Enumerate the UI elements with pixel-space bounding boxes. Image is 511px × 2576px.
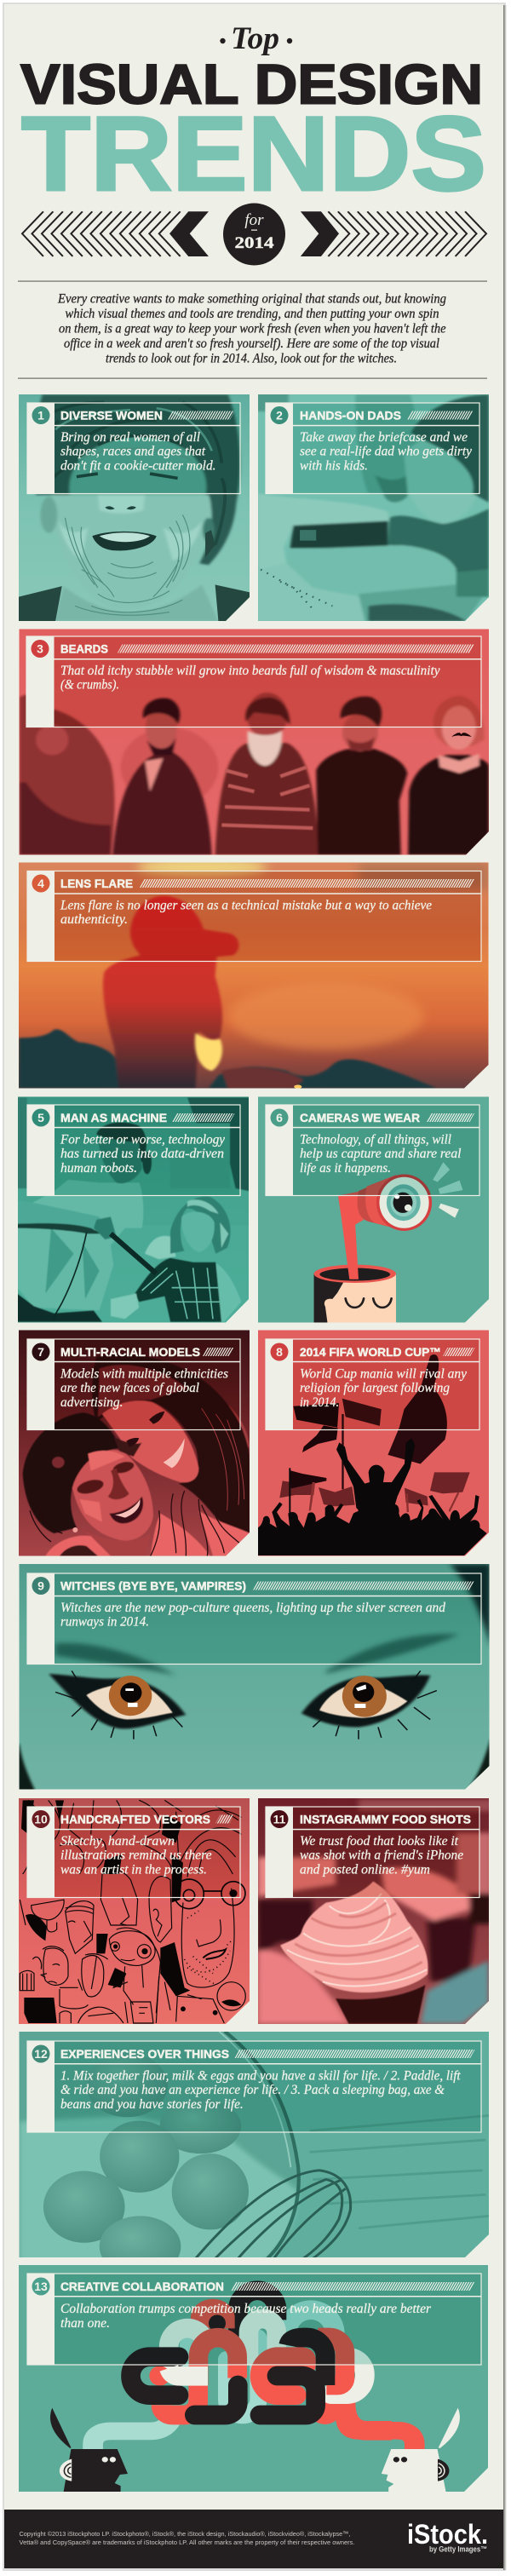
- text box 3: That old itchy stubble will grow into beards full of wisdom & masculinity: [60, 664, 440, 678]
- text box 12: 12: [34, 2047, 48, 2061]
- text box 9: WITCHES (BYE BYE, VAMPIRES): [60, 1579, 246, 1593]
- text box 13: than one.: [60, 2316, 110, 2331]
- logo: iStock by Getty Images: by Getty Images™: [429, 2545, 487, 2554]
- text box 3: (& crumbs).: [60, 678, 119, 693]
- text box 7: Models with multiple ethnicities: [60, 1366, 228, 1382]
- illustration: two heads with tangled thoughts: [15, 2262, 492, 2496]
- text box 11: INSTAGRAMMY FOOD SHOTS: [300, 1813, 471, 1826]
- icon: right light head: [382, 2408, 460, 2492]
- text box 10: 10: [34, 1813, 48, 1826]
- photo: pink cupcakes: [256, 1797, 492, 2026]
- copyright text: Vetta® and CopySpace® are trademarks of iStockphoto LP. All other marks are the property of their respective owners.: [19, 2539, 354, 2546]
- panel 8: FIFA world cup: [256, 1327, 494, 1559]
- intro text: office in a week and aren't so fresh yourself). Here are some of the top visual: [64, 336, 439, 351]
- text box 10: was an artist in the process.: [60, 1862, 207, 1877]
- text box 12: beans and you have stories for life.: [60, 2097, 244, 2112]
- badge: for 2014: 2014: [235, 234, 274, 252]
- photo: brown eyes in teal face: [18, 1561, 491, 1792]
- panel 1: diverse women: [16, 393, 253, 624]
- badge: for 2014: for: [244, 211, 264, 229]
- icon: left dark head: [50, 2408, 128, 2492]
- text box 8: World Cup mania will rival any: [300, 1366, 467, 1382]
- photo: woman and girl: [15, 1329, 254, 1559]
- photo: sunset silhouette: [16, 857, 492, 1090]
- panel 5: man as machine: [15, 1095, 254, 1325]
- photo: retro man and woman: [15, 1095, 254, 1325]
- panel 3: beards: [18, 627, 491, 859]
- text box 8: 2014 FIFA WORLD CUP™: [300, 1345, 441, 1359]
- text box 10: Sketchy, hand-drawn: [60, 1834, 175, 1849]
- text box 11: [266, 1807, 479, 1898]
- text box 5: 5: [37, 1111, 44, 1124]
- text box 9: Witches are the new pop-culture queens, lighting up the silver screen and: [60, 1601, 445, 1615]
- text box 8: 8: [276, 1345, 283, 1359]
- text box 12: EXPERIENCES OVER THINGS: [60, 2047, 229, 2061]
- text box 10: [27, 1807, 240, 1898]
- title: Visual Design: VISUAL DESIGN: [20, 53, 483, 116]
- text box 11: 11: [273, 1813, 286, 1826]
- text box 6: Technology, of all things, will: [300, 1133, 451, 1147]
- copyright text: [19, 2530, 354, 2546]
- text box 9: 9: [37, 1579, 44, 1593]
- text box 6: 6: [276, 1111, 283, 1124]
- title: Top: Top: [231, 21, 279, 56]
- text box 13: CREATIVE COLLABORATION: [60, 2280, 224, 2293]
- text box 8: religion for largest following: [300, 1381, 450, 1395]
- text box 4: authenticity.: [60, 912, 128, 927]
- photo: eggs and whisk in bowl: [18, 2030, 491, 2277]
- text box 2: see a real-life dad who gets dirty: [300, 445, 472, 459]
- text box 5: has turned us into data-driven: [60, 1147, 224, 1161]
- text box 6: CAMERAS WE WEAR: [300, 1111, 420, 1124]
- text box 3: 3: [37, 642, 43, 656]
- header: [20, 21, 486, 266]
- text box 4: Lens flare is no longer seen as a technical mistake but a way to achieve: [60, 898, 432, 913]
- text box 1: 1: [37, 409, 44, 423]
- icon: light rays: [433, 1162, 462, 1218]
- text box 11: and posted online. #yum: [300, 1862, 430, 1877]
- text box 3: [26, 636, 481, 727]
- text box 9: runways in 2014.: [60, 1615, 149, 1630]
- text box 4: 4: [37, 877, 44, 890]
- text box 8: in 2014.: [300, 1395, 339, 1410]
- intro text: which visual themes and tools are trending, and then putting your own spin: [65, 307, 439, 321]
- icon: interlaced tubes: [131, 2291, 392, 2430]
- photo: dad and child: [256, 393, 492, 624]
- text box 13: [27, 2274, 481, 2365]
- text box 5: MAN AS MACHINE: [60, 1111, 167, 1124]
- panel 13: creative collaboration: [15, 2262, 492, 2496]
- text box 7: are the new faces of global: [60, 1381, 199, 1395]
- text box 12: [27, 2041, 481, 2132]
- text box 11: was shot with a friend's iPhone: [300, 1849, 463, 1863]
- text box 2: [266, 403, 479, 494]
- icon: right eye: [301, 1670, 437, 1739]
- text box 7: 7: [37, 1345, 44, 1359]
- icon: periscope stalk and barrel: [338, 1175, 397, 1279]
- title: Trends: TRENDS: [21, 95, 486, 213]
- text box 4: LENS FLARE: [60, 877, 133, 890]
- footer: [4, 2510, 503, 2568]
- text box 10: illustrations remind us there: [60, 1849, 212, 1863]
- text box 11: We trust food that looks like it: [300, 1834, 459, 1849]
- copyright text: Copyright ©2013 iStockphoto LP. iStockphoto®, iStock®, the iStock design, iStockaudio®, iStockvideo®, iStockalypse™,: [19, 2530, 351, 2538]
- text box 1: [27, 403, 240, 494]
- text box 1: DIVERSE WOMEN: [60, 409, 163, 423]
- text box 10: HANDCRAFTED VECTORS: [60, 1813, 210, 1826]
- text box 1: don't fit a cookie-cutter mold.: [60, 458, 216, 473]
- text box 4: [27, 871, 481, 961]
- text box 3: BEARDS: [60, 642, 108, 656]
- text box 1: Bring on real women of all: [60, 430, 200, 445]
- text box 12: & ride and you have an experience for life. / 3. Pack a sleeping bag, axe &: [60, 2083, 445, 2097]
- chevron band: [22, 211, 486, 256]
- text box 6: help us capture and share real: [300, 1147, 462, 1161]
- icon: eye lens: [376, 1175, 432, 1231]
- intro text: on them, is a great way to keep your work fresh (even when you haven't left the: [59, 322, 446, 336]
- intro text: trends to look out for in 2014. Also, look out for the witches.: [106, 351, 397, 366]
- text box 7: MULTI-RACIAL MODELS: [60, 1345, 200, 1359]
- illustration: crowd silhouette: [256, 1327, 494, 1559]
- text box 2: with his kids.: [300, 458, 368, 473]
- panel 10: handcrafted vectors: [17, 1796, 252, 2026]
- text box 1: shapes, races and ages that: [60, 445, 206, 459]
- intro text: Every creative wants to make something original that stands out, but knowing: [57, 291, 446, 307]
- text box 13: Collaboration trumps competition because two heads really are better: [60, 2302, 432, 2316]
- text box 5: [27, 1105, 240, 1196]
- photo: smiling woman: [16, 393, 253, 624]
- text box 13: 13: [34, 2280, 48, 2293]
- text box 6: [266, 1105, 479, 1196]
- text box 5: human robots.: [60, 1161, 137, 1176]
- icon: head with open cup: [314, 1265, 396, 1324]
- panel 6: cameras we wear: [256, 1095, 492, 1325]
- text box 8: [266, 1339, 479, 1429]
- text box 2: HANDS-ON DADS: [300, 409, 401, 423]
- panel 9: witches: [18, 1561, 491, 1792]
- photo: bearded figures: [18, 627, 491, 859]
- panel 11: instagrammy food shots: [256, 1797, 492, 2026]
- text box 5: For better or worse, technology: [60, 1133, 225, 1147]
- panel 2: hands-on dads: [256, 393, 492, 624]
- panel 4: lens flare: [16, 857, 492, 1090]
- intro text: [57, 291, 446, 366]
- illustration: sketched faces: [17, 1796, 252, 2026]
- logo: iStock by Getty Images: iStock.: [407, 2519, 488, 2550]
- panel 12: experiences over things: [18, 2030, 491, 2277]
- text box 7: [27, 1339, 240, 1429]
- badge: for 2014: [223, 203, 285, 266]
- illustration: eye camera on head: [256, 1095, 492, 1325]
- text box 12: 1. Mix together flour, milk & eggs and you have a skill for life. / 2. Paddle, lift: [60, 2068, 461, 2084]
- panel 7: multi-racial models: [15, 1329, 254, 1559]
- icon: left eye: [49, 1670, 186, 1739]
- text box 2: 2: [276, 409, 283, 423]
- text box 2: Take away the briefcase and we: [300, 430, 468, 445]
- title: Top: [220, 21, 292, 56]
- text box 9: [27, 1573, 481, 1665]
- text box 6: life as it happens.: [300, 1161, 391, 1176]
- text box 7: advertising.: [60, 1395, 123, 1410]
